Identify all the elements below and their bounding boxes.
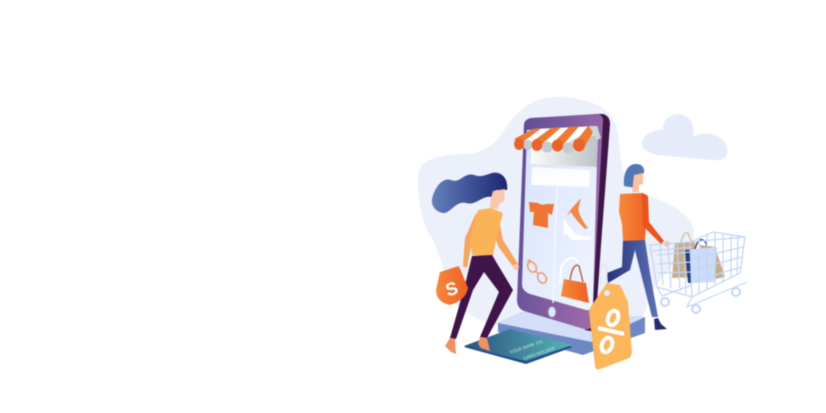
face	[632, 173, 643, 192]
percent sign	[598, 309, 624, 354]
sweater	[619, 193, 648, 241]
bag	[436, 266, 468, 305]
hair	[624, 164, 644, 188]
phone base	[498, 312, 645, 355]
icon: high heel	[563, 198, 592, 240]
woman with shopping bag	[432, 173, 519, 354]
face	[490, 189, 505, 209]
bags in cart	[672, 233, 725, 283]
home button	[548, 306, 556, 318]
legs	[607, 240, 658, 317]
arm	[642, 193, 664, 244]
shopping cart	[650, 232, 747, 313]
white banner	[531, 167, 590, 187]
phone side	[585, 114, 610, 332]
price tag	[589, 264, 632, 370]
awning	[514, 126, 601, 154]
front arm	[492, 220, 518, 268]
phone screen	[522, 127, 598, 310]
icon: handbag	[560, 258, 589, 303]
cart frame	[650, 232, 747, 307]
card text: CARD HOLDER	[523, 345, 556, 361]
background blob	[418, 97, 694, 328]
legs	[450, 255, 513, 339]
top	[470, 208, 503, 256]
store sign	[531, 135, 597, 167]
card text: YOUR BANK 101	[509, 339, 544, 355]
cloud	[642, 114, 727, 160]
man with cart	[607, 164, 670, 330]
phone	[498, 114, 645, 355]
back arm	[463, 213, 482, 268]
icon: t-shirt	[529, 202, 554, 228]
icon: glasses	[526, 260, 548, 285]
shoes	[445, 337, 490, 354]
credit card	[464, 329, 573, 364]
bag letter: S	[443, 278, 460, 300]
shelf dividers	[553, 187, 557, 303]
cart wheels	[661, 288, 740, 313]
phone body	[517, 114, 603, 329]
card text	[509, 339, 556, 361]
hair	[432, 173, 507, 213]
shoe	[654, 318, 667, 330]
